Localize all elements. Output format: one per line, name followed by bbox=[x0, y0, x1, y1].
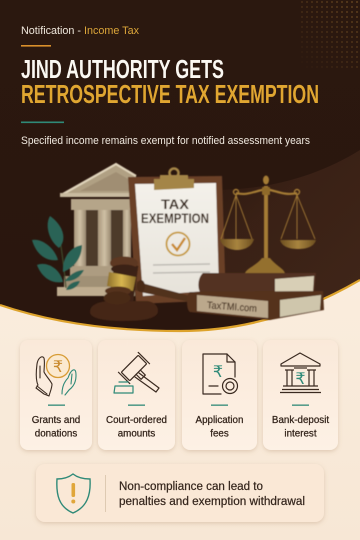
card: application fees bbox=[182, 340, 257, 450]
divider bbox=[292, 404, 309, 406]
divider bbox=[128, 404, 145, 406]
icon: hands and rupee coin: ₹ bbox=[53, 359, 63, 376]
icon: gavel bbox=[90, 256, 190, 321]
dark header panel with curved base bbox=[0, 0, 360, 331]
icon: gavel outline bbox=[114, 352, 159, 393]
clipboard heading second line: EXEMPTION bbox=[141, 211, 209, 226]
illustration: legal still life bbox=[32, 164, 324, 321]
label: Court-ordered bbox=[106, 415, 167, 426]
icon: warning shield bbox=[57, 474, 90, 513]
label: Application bbox=[196, 415, 243, 426]
label: Grants and bbox=[32, 415, 80, 426]
eyebrow: notification category: Notification - Income Tax bbox=[21, 25, 139, 37]
icon: document with seal: ₹ bbox=[213, 364, 223, 381]
callout: non-compliance warning bbox=[36, 464, 324, 522]
divider bbox=[211, 404, 228, 406]
label: donations bbox=[35, 428, 77, 440]
title: JIND AUTHORITY GETS bbox=[21, 56, 224, 84]
card: grants and donations bbox=[20, 340, 92, 450]
book label: TaxTMI.com bbox=[207, 300, 257, 315]
icon: stacked books bbox=[187, 273, 324, 320]
divider bbox=[48, 404, 65, 406]
accent line: teal bbox=[21, 122, 64, 123]
subtitle: Specified income remains exempt for notified assessment years bbox=[21, 135, 310, 147]
label: Bank-deposit bbox=[272, 415, 329, 426]
callout text: penalties and exemption withdrawal bbox=[119, 496, 305, 508]
icon: balance scales bbox=[220, 176, 316, 274]
label: interest bbox=[284, 428, 317, 440]
title bbox=[21, 56, 319, 109]
accent line: gold bbox=[21, 45, 51, 47]
label: amounts bbox=[118, 428, 155, 440]
label: fees bbox=[210, 428, 229, 440]
card: court-ordered amounts bbox=[98, 340, 175, 450]
check circle bbox=[166, 232, 190, 256]
card: bank-deposit interest bbox=[263, 340, 338, 450]
clipboard heading: TAX bbox=[161, 197, 189, 212]
icon: clipboard bbox=[128, 168, 225, 304]
icon: classical building bbox=[57, 164, 136, 296]
icon: green leaves bbox=[32, 216, 84, 290]
callout text: Non-compliance can lead to bbox=[119, 481, 263, 493]
icon: bank: ₹ bbox=[295, 371, 306, 388]
